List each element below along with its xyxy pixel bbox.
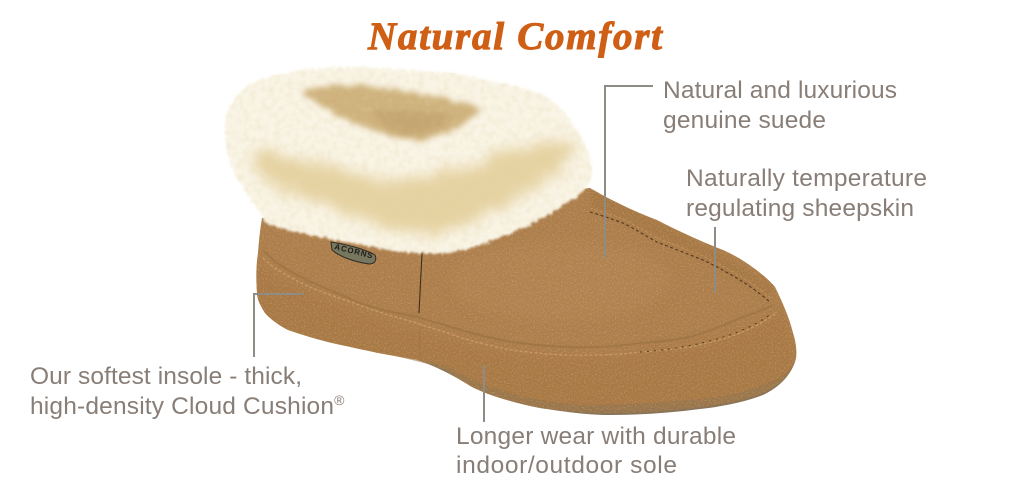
label: insole: Our softest insole - thick, <box>30 363 302 390</box>
label: sole: indoor/outdoor sole <box>456 452 677 479</box>
callout: sole <box>456 365 736 479</box>
seams and stitching <box>263 208 777 357</box>
leader line: sheepskin <box>714 227 716 293</box>
leader line: insole <box>254 294 303 357</box>
brand tag <box>331 242 376 264</box>
label: sole: Longer wear with durable <box>456 423 736 450</box>
fur opening <box>304 85 481 140</box>
slipper illustration <box>220 60 810 420</box>
fur collar <box>220 60 600 260</box>
leader line: suede <box>605 86 653 257</box>
fur curl texture <box>225 67 592 251</box>
title: Natural Comfort <box>367 15 663 58</box>
tag plate <box>331 242 376 264</box>
label: insole: high-density Cloud Cushion <box>30 393 334 420</box>
suede shading and grain <box>250 180 810 420</box>
label: sheepskin: regulating sheepskin <box>686 195 914 222</box>
label: sheepskin: Naturally temperature <box>686 165 927 192</box>
label: insole: ® <box>334 392 345 408</box>
fur tan shading <box>225 67 592 251</box>
callout: suede <box>605 77 897 257</box>
fur collar shape <box>225 67 592 254</box>
label: suede: Natural and luxurious <box>663 77 897 104</box>
label: suede: genuine suede <box>663 107 826 134</box>
tan crescent <box>250 142 571 233</box>
callout: insole <box>30 294 345 420</box>
fur opening dark core <box>372 110 455 135</box>
sole shadow <box>412 340 796 415</box>
callout: sheepskin <box>686 165 927 293</box>
tag text: ACORNS <box>334 242 374 261</box>
suede body <box>256 188 796 405</box>
leader line: sole <box>483 365 485 422</box>
